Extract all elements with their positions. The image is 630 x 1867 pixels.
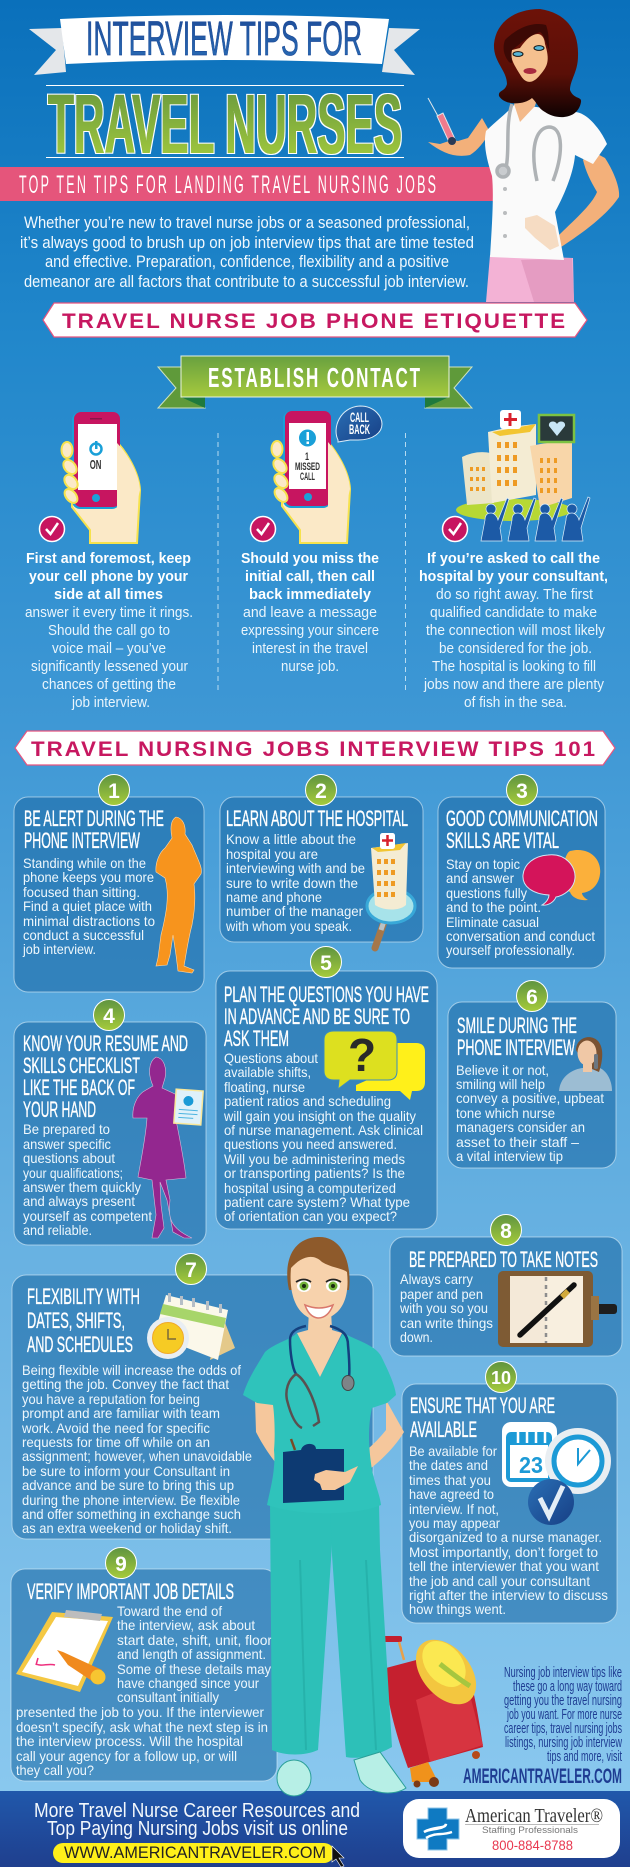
card 1 text: Find a quiet place with: [23, 899, 152, 914]
card 9 text: have changed since your: [117, 1676, 259, 1691]
card 7 text: be sure to inform your Consultant in: [22, 1464, 230, 1479]
card 8: [390, 1214, 622, 1356]
card 1 text: conduct a successful: [23, 928, 144, 943]
scrub top: [243, 1333, 396, 1513]
text column 1: [25, 550, 193, 711]
url pill: WWW.AMERICANTRAVELER.COM: [64, 1843, 326, 1862]
card 2 text: sure to write down the: [226, 876, 358, 891]
card 7 text: prompt and are familiar with team: [22, 1406, 220, 1421]
icon: phone on: [61, 412, 140, 543]
badge 6: 6: [526, 986, 538, 1009]
intro paragraph: [20, 214, 474, 291]
card 10 text: right after the interview to discuss: [409, 1588, 608, 1603]
card 5 title: PLAN THE QUESTIONS YOU HAVE: [224, 982, 429, 1007]
card 7 text: during the phone interview. Be flexible: [22, 1493, 240, 1508]
badge 8: 8: [500, 1220, 512, 1243]
card 7 text: assignment; however, when unavoidable: [22, 1449, 252, 1464]
text column 2: expressing your sincere: [241, 622, 379, 639]
card 5 text: [223, 1051, 423, 1224]
text column 3: hospital by your consultant,: [419, 568, 608, 585]
badge 8: [490, 1214, 522, 1246]
icon: phone missed call: 1: [305, 451, 309, 463]
right arm: [338, 1400, 404, 1484]
card 1 title: [24, 806, 164, 853]
card 7 title: FLEXIBILITY WITH: [27, 1284, 140, 1309]
card 2 text: with whom you speak.: [225, 919, 352, 934]
subtitle bar: TOP TEN TIPS FOR LANDING TRAVEL NURSING JOBS: [19, 171, 436, 199]
card 2 text: Know a little about the: [226, 832, 356, 847]
card 7 text: requests for time off while on an: [22, 1435, 210, 1450]
card 9 text: the interview, ask about: [117, 1618, 255, 1633]
card 9 text: presented the job to you. If the interviewer: [16, 1705, 264, 1720]
icon: phone missed call: CALL: [300, 471, 315, 483]
text column 1: voice mail – you’ve: [52, 640, 166, 657]
card 5 text: Questions about: [224, 1051, 318, 1066]
intro paragraph: it’s always good to brush up on job interview tips that are time tested: [20, 234, 474, 252]
card 3 text: [446, 857, 595, 958]
card 10 text: the dates and: [409, 1458, 488, 1473]
card 5 title: IN ADVANCE AND BE SURE TO: [224, 1004, 410, 1029]
left arm and hand with syringe: [428, 98, 490, 156]
card 2 text: number of the manager: [226, 904, 363, 919]
card 10 text: disorganized to a nurse manager.: [409, 1530, 602, 1545]
text column 2: [241, 550, 379, 675]
card 3: [438, 774, 605, 968]
card 6 text: managers consider an: [456, 1120, 585, 1135]
badge 4: 4: [103, 1005, 115, 1028]
card 6: [448, 980, 616, 1168]
card 8 text: can write things: [400, 1316, 493, 1331]
card 5 text: patient ratios and scheduling: [224, 1094, 391, 1109]
neck: [514, 72, 545, 122]
text column 3: The hospital is looking to fill: [432, 658, 596, 675]
left leg: [270, 1503, 334, 1754]
card 7 text: as an extra weekend or holiday shift.: [22, 1521, 232, 1536]
card 3 text: and to the point.: [446, 900, 541, 915]
speech bubble: call back: [336, 406, 382, 442]
icon: phone missed call: [271, 411, 350, 543]
card 1 text: minimal distractions to: [23, 914, 155, 929]
shoes: [277, 1752, 406, 1796]
badge 1: 1: [108, 780, 120, 803]
right arm: [525, 150, 619, 250]
card 3 text: conversation and conduct: [446, 929, 595, 944]
intro paragraph: demeanor are all factors that contribute to a successful job interview.: [24, 273, 469, 291]
buttons: [503, 187, 507, 238]
hand on clipboard: [314, 1466, 358, 1490]
badge 4: [94, 1000, 124, 1030]
card 4 title: SKILLS CHECKLIST: [23, 1053, 140, 1078]
badge 2: 2: [315, 780, 327, 803]
text column 3: be considered for the job.: [439, 640, 592, 657]
banner: interview tips 101: [15, 731, 615, 765]
card 4 title: KNOW YOUR RESUME AND: [23, 1031, 188, 1056]
dashed dividers: [218, 433, 406, 690]
pen: [291, 1439, 295, 1450]
card 5 text: hospital using a computerized: [224, 1181, 396, 1196]
card 9 text: they call you?: [16, 1763, 94, 1778]
card 5 text: of nurse management. Ask clinical: [224, 1123, 423, 1138]
speech bubble: call back: CALL: [350, 409, 369, 425]
card 9 text: the interview process. Will the hospital: [16, 1734, 243, 1749]
text column 3: qualified candidate to make: [430, 604, 597, 621]
card 7 text: you have a reputation for being: [22, 1392, 200, 1407]
face: [511, 34, 548, 82]
card 1 text: [22, 856, 155, 957]
card 6 text: convey a positive, upbeat: [456, 1091, 604, 1106]
right leg: [330, 1503, 392, 1758]
card 10: [402, 1362, 617, 1623]
hair fringe: [504, 24, 550, 63]
card 2 text: hospital you are: [226, 847, 318, 862]
text column 1: First and foremost, keep: [26, 550, 191, 567]
card 8 text: down.: [400, 1330, 433, 1345]
card 9 text: doesn’t specify, ask what the next step is in: [16, 1720, 268, 1735]
card 1 text: phone keeps you more: [23, 870, 154, 885]
card 4 title: YOUR HAND: [23, 1097, 96, 1122]
text column 2: Should you miss the: [241, 550, 379, 567]
card 7 text: and offer something in exchange such: [22, 1507, 241, 1522]
card 8 text: [399, 1272, 493, 1345]
card 7 text: [21, 1363, 252, 1536]
icon: question bubbles: [324, 1029, 425, 1100]
illustration: nurse in scrubs: [243, 1237, 406, 1796]
card 2 text: interviewing with and be: [226, 861, 365, 876]
clipboard: [283, 1444, 344, 1503]
subtitle bar: [0, 167, 494, 201]
card 1 text: job interview.: [22, 942, 96, 957]
card 4 text: answer them quickly: [23, 1180, 141, 1195]
card 4 text: and reliable.: [23, 1223, 92, 1238]
card 2 title: LEARN ABOUT THE HOSPITAL: [226, 806, 408, 831]
card 10 text: [409, 1444, 608, 1617]
eyes: [513, 46, 544, 56]
icon: notebook and pen: [498, 1271, 617, 1347]
card 10 text: interview. If not,: [409, 1502, 499, 1517]
card 7 text: work. Avoid the need for specific: [21, 1421, 210, 1436]
card 5 text: of orientation can you expect?: [224, 1209, 397, 1224]
icon: calendar, clock and check: 23: [519, 1452, 543, 1478]
card 7 text: advance and be sure to bring this up: [22, 1478, 234, 1493]
card 6 title: [457, 1013, 577, 1060]
card 5 title: ASK THEM: [224, 1026, 289, 1051]
card 4 title: LIKE THE BACK OF: [23, 1075, 135, 1100]
card 1 title: PHONE INTERVIEW: [24, 828, 140, 853]
badge 10: 10: [491, 1368, 511, 1388]
card 4: [14, 1000, 206, 1245]
card 7 text: getting the job. Convey the fact that: [22, 1377, 229, 1392]
card 5 text: questions you need answered.: [224, 1137, 397, 1152]
card 9 text: Some of these details may: [117, 1662, 271, 1677]
card 8 text: with you so you: [399, 1301, 488, 1316]
footer text: [34, 1800, 360, 1840]
card 6 text: tone which nurse: [456, 1106, 555, 1121]
ribbon: establish contact: ESTABLISH CONTACT: [208, 362, 420, 393]
card 6 text: a vital interview tip: [456, 1149, 563, 1164]
pants: [486, 255, 574, 302]
hand on hip: [525, 215, 559, 250]
title ribbon: interview tips for: INTERVIEW TIPS FOR: [86, 13, 362, 66]
hair back: [494, 9, 581, 117]
stethoscope: [497, 104, 560, 181]
text column 2: and leave a message: [243, 604, 377, 621]
card 9 text: and length of assignment.: [117, 1647, 266, 1662]
text column 2: nurse job.: [281, 658, 339, 675]
logo: [403, 1799, 620, 1858]
card 10 text: have agreed to: [409, 1487, 494, 1502]
icon: smiling woman on phone: [559, 1037, 612, 1091]
left arm: [255, 1400, 298, 1478]
hair: [287, 1237, 350, 1290]
lips: [524, 68, 536, 74]
card 8 text: paper and pen: [400, 1287, 483, 1302]
badge 6: [516, 980, 548, 1012]
banner: travel nurse job phone etiquette: [43, 303, 587, 337]
card 7 title: [27, 1284, 140, 1357]
text column 2: initial call, then call: [245, 568, 375, 585]
card 1 text: focused than sitting.: [23, 885, 140, 900]
text column 1: chances of getting the: [42, 676, 176, 693]
card 4 text: yourself as competent: [23, 1209, 152, 1224]
text column 1: answer it every time it rings.: [25, 604, 193, 621]
card 4 text: Be prepared to: [23, 1122, 110, 1137]
icon: question bubbles: ?: [348, 1029, 376, 1081]
card 7 text: Being flexible will increase the odds of: [22, 1363, 241, 1378]
uniform: [485, 104, 607, 260]
card 4 text: answer specific: [23, 1137, 111, 1152]
footer text: More Travel Nurse Career Resources and: [34, 1800, 360, 1822]
card 4 text: questions about: [23, 1151, 115, 1166]
intro paragraph: and effective. Preparation, confidence, flexibility and a positive: [45, 253, 449, 271]
closing note: [463, 1665, 622, 1788]
card 4 text: and always present: [23, 1194, 135, 1209]
card 7 title: DATES, SHIFTS,: [27, 1308, 125, 1333]
text column 3: [419, 550, 608, 711]
badge 1: [98, 774, 130, 806]
badge 9: 9: [115, 1553, 127, 1576]
card 9: [11, 1548, 277, 1781]
smile: [305, 1305, 333, 1318]
text column 3: If you’re asked to call the: [427, 550, 600, 567]
card 5 text: or transporting patients? Is the: [224, 1166, 405, 1181]
badge 2: [306, 774, 336, 806]
text column 3: the connection will most likely: [426, 622, 605, 639]
title ribbon: interview tips for: [29, 13, 420, 75]
card 1: [14, 774, 204, 992]
pant folds: [300, 1560, 376, 1750]
card 3 text: Stay on topic: [446, 857, 520, 872]
check marks: [40, 516, 468, 542]
footer text: Top Paying Nursing Jobs visit us online: [47, 1818, 348, 1840]
icon: calendar and clock: [147, 1293, 235, 1360]
face: [291, 1257, 348, 1320]
icon: purple silhouette with clipboard: [133, 1057, 203, 1238]
card 9 text: call your agency for a follow up, or will: [16, 1749, 237, 1764]
icon: phone missed call: MISSED: [295, 461, 320, 473]
card 10 text: times that you: [409, 1473, 491, 1488]
illustration: nurse with syringe: [428, 9, 619, 302]
badge 5: [310, 946, 342, 978]
intro paragraph: Whether you’re new to travel nurse jobs or a seasoned professional,: [24, 214, 470, 232]
text column 1: side at all times: [54, 586, 163, 603]
card 10 text: the job and call your consultant: [409, 1574, 590, 1589]
card 7 title: AND SCHEDULES: [27, 1332, 133, 1357]
card 2: [220, 774, 423, 948]
card 6 text: asset to their staff –: [456, 1135, 579, 1150]
card 3 text: Eliminate casual: [446, 915, 539, 930]
badge 7: [176, 1254, 206, 1284]
card 4 text: [23, 1122, 152, 1238]
card 10 text: Most importantly, don’t forget to: [409, 1545, 598, 1560]
card 9 text: [16, 1604, 272, 1778]
text column 1: your cell phone by your: [29, 568, 188, 585]
stethoscope chest piece: [342, 1376, 354, 1390]
badge 9: [106, 1548, 136, 1578]
icon: calendar, clock and check: [502, 1422, 611, 1525]
text column 1: job interview.: [71, 694, 150, 711]
card 4 title: [23, 1031, 188, 1122]
footer: [0, 1791, 630, 1867]
text column 1: significantly lessened your: [31, 658, 188, 675]
badge 5: 5: [320, 952, 332, 975]
card 5 text: floating, nurse: [224, 1080, 305, 1095]
badge 7: 7: [185, 1259, 197, 1282]
card 10 text: you may appear: [409, 1516, 500, 1531]
card 1 title: BE ALERT DURING THE: [24, 806, 164, 831]
card 10 text: how things went.: [409, 1602, 506, 1617]
text column 3: do so right away. The first: [436, 586, 594, 603]
icon: hospital under magnifier: [367, 833, 415, 948]
logo: 800-884-8788: [492, 1837, 573, 1853]
speech bubble: call back: BACK: [349, 421, 370, 437]
text column 1: Should the call go to: [48, 622, 170, 639]
card 6 text: [456, 1063, 604, 1164]
card 5 text: available shifts,: [224, 1065, 311, 1080]
card 2 text: name and phone: [226, 890, 322, 905]
card 9 text: start date, shift, unit, floor: [117, 1633, 272, 1648]
card 5 title: [224, 982, 429, 1051]
card 6 text: Believe it or not,: [456, 1063, 549, 1078]
banner: interview tips 101: TRAVEL NURSING JOBS INTERVIEW TIPS 101: [31, 738, 597, 761]
logo: Staffing Professionals: [482, 1825, 578, 1836]
logo: American Traveler®: [465, 1805, 603, 1827]
cursor icon: [332, 1846, 344, 1867]
ribbon: establish contact: [158, 356, 472, 408]
badge 3: [506, 774, 538, 806]
card 10 title: [410, 1393, 555, 1442]
card 9 text: Toward the end of: [117, 1604, 222, 1619]
card 10 text: tell the interviewer that you want: [409, 1559, 599, 1574]
card 3 text: yourself professionally.: [446, 943, 575, 958]
card 10 title: AVAILABLE: [410, 1417, 477, 1442]
text column 2: interest in the travel: [252, 640, 368, 657]
card 3 title: [446, 806, 598, 853]
eyes: [296, 1280, 341, 1292]
card 3 text: and answer: [446, 871, 514, 886]
suitcase with hat: [382, 1628, 488, 1788]
card 7: [12, 1254, 373, 1539]
card 5 text: will gain you insight on the quality: [223, 1109, 416, 1124]
stethoscope: [286, 1326, 349, 1428]
card 6 text: smiling will help: [456, 1077, 545, 1092]
card 5 text: Will you be administering meds: [224, 1152, 405, 1167]
card 4 text: your qualifications;: [23, 1166, 123, 1181]
card 1 text: Standing while on the: [23, 856, 146, 871]
card 3 text: questions fully: [446, 886, 527, 901]
icon: clipboard and pencil: [16, 1610, 113, 1692]
card 5 text: patient care system? What type: [224, 1195, 410, 1210]
banner: travel nurse job phone etiquette: TRAVEL NURSE JOB PHONE ETIQUETTE: [62, 310, 567, 333]
card 8 text: Always carry: [400, 1272, 473, 1287]
icon: hospital with nurses: [456, 410, 590, 541]
badge 3: 3: [516, 780, 528, 803]
card 10 text: Be available for: [409, 1444, 497, 1459]
icon: orange silhouette: [156, 817, 201, 973]
badge 10: [486, 1362, 516, 1392]
neck and chest: [297, 1310, 342, 1377]
card 9 title: VERIFY IMPORTANT JOB DETAILS: [27, 1579, 234, 1604]
icon: phone on: ON: [90, 458, 102, 473]
card 5: [216, 946, 437, 1229]
text column 2: back immediately: [249, 586, 372, 603]
card 9 text: consultant initially: [117, 1690, 219, 1705]
icon: speech bubbles: [523, 850, 600, 905]
text column 3: jobs now and there are plenty: [423, 676, 604, 693]
text column 3: of fish in the sea.: [464, 694, 567, 711]
card 2 text: [225, 832, 365, 934]
